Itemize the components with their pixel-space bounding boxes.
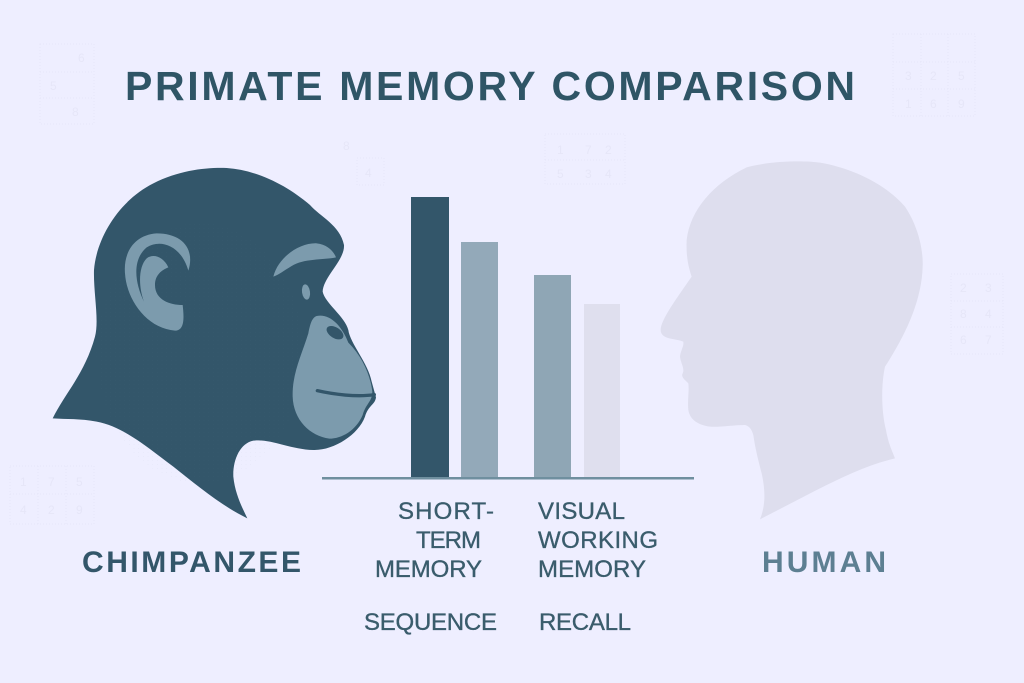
label: visual working memory: MEMORY bbox=[538, 556, 646, 583]
background: faint number grids: 8 bbox=[72, 105, 79, 119]
background: faint number grids: 6 bbox=[930, 97, 937, 111]
background: faint number grids: 4 bbox=[365, 166, 372, 180]
bar: short-term memory human bbox=[461, 242, 498, 478]
bar: short-term memory chimpanzee bbox=[411, 197, 449, 478]
background: faint number grids: 2 bbox=[605, 143, 612, 157]
background: faint number grids: 7 bbox=[985, 333, 992, 347]
background: faint number grids: 2 bbox=[48, 503, 55, 517]
label: recall: RECALL bbox=[539, 609, 631, 636]
background: faint number grids: 1 bbox=[557, 143, 564, 157]
title: PRIMATE MEMORY COMPARISON bbox=[125, 63, 855, 109]
background: faint number grids: 5 bbox=[50, 79, 57, 93]
background: faint number grids: 2 bbox=[960, 281, 967, 295]
chimp brow bbox=[273, 243, 336, 277]
background: faint number grids: 7 bbox=[585, 143, 592, 157]
background: faint number grids: 9 bbox=[76, 503, 83, 517]
label: short-term memory: SHORT- bbox=[398, 498, 494, 525]
bar chart bbox=[322, 197, 694, 480]
background: faint number grids: 3 bbox=[985, 281, 992, 295]
chimp nostril bbox=[324, 323, 346, 342]
background: faint number grids: 4 bbox=[605, 167, 612, 181]
label: sequence: SEQUENCE bbox=[364, 609, 497, 636]
background: faint number grids: 6 bbox=[78, 51, 85, 65]
background: faint number grids: 5 bbox=[557, 167, 564, 181]
label: visual working memory bbox=[538, 498, 658, 583]
background: faint number grids: 1 bbox=[905, 97, 912, 111]
chimp ear bbox=[125, 233, 190, 331]
background: faint number grids: 3 bbox=[585, 167, 592, 181]
background: faint number grids: 9 bbox=[958, 97, 965, 111]
label: short-term memory: TERM bbox=[416, 527, 481, 554]
background: faint number grids: 1 bbox=[20, 475, 27, 489]
axis line bbox=[322, 477, 694, 480]
chimp silhouette bbox=[53, 168, 376, 518]
label: chimpanzee: CHIMPANZEE bbox=[82, 546, 301, 579]
chimp eye bbox=[301, 284, 311, 300]
icon: chimpanzee head bbox=[53, 168, 376, 518]
background: faint number grids: 4 bbox=[985, 307, 992, 321]
background: faint number grids: 6 bbox=[960, 333, 967, 347]
background: faint number grids: 3 bbox=[905, 69, 912, 83]
label: human: HUMAN bbox=[762, 546, 886, 579]
background: faint number grids: 4 bbox=[20, 503, 27, 517]
bar: visual working memory human bbox=[584, 304, 620, 478]
label: short-term memory: MEMORY bbox=[375, 556, 482, 583]
chimp mouth bbox=[317, 391, 374, 396]
background: faint number grids: 2 bbox=[930, 69, 937, 83]
icon: human head silhouette bbox=[661, 161, 923, 519]
background: faint number grids: 8 bbox=[343, 139, 350, 153]
background: faint number grids: 8 bbox=[960, 307, 967, 321]
background: faint number grids bbox=[10, 34, 1003, 524]
chimp muzzle bbox=[293, 316, 372, 439]
chimp skin texture bbox=[97, 223, 303, 483]
label: short-term memory bbox=[375, 498, 494, 583]
background: faint number grids: 5 bbox=[958, 69, 965, 83]
background: faint number grids: 5 bbox=[76, 475, 83, 489]
label: visual working memory: WORKING bbox=[538, 527, 658, 554]
label: visual working memory: VISUAL bbox=[538, 498, 625, 525]
bar: visual working memory chimpanzee bbox=[534, 275, 571, 478]
background: faint number grids: 7 bbox=[48, 475, 55, 489]
